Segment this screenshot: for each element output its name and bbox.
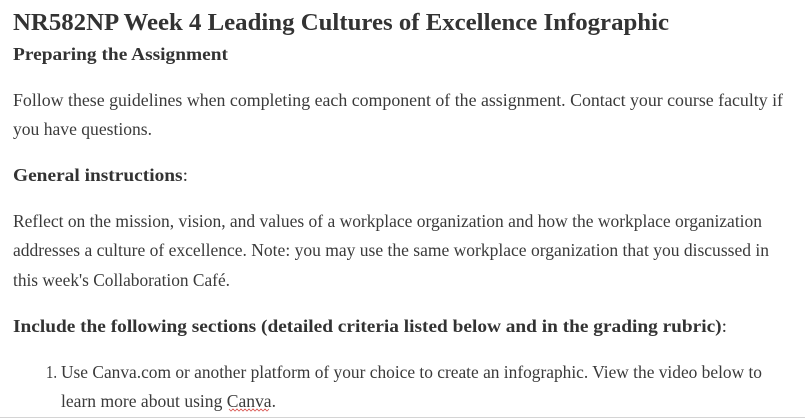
heading: general instructions: General instructions : — [13, 165, 188, 185]
title: NR582NP Week 4 Leading Cultures of Excellence Infographic — [13, 9, 669, 36]
text block: reflection instructions — [13, 211, 769, 290]
numbered list item: Use Canva.com or another platform of your choice to create an infographic. View the video below to — [61, 362, 762, 382]
heading: included sections: Include the following sections (detailed criteria listed below and in the grading rubric) : — [13, 316, 727, 336]
heading: preparing the assignment: Preparing the Assignment — [13, 44, 228, 64]
numbered list item — [46, 362, 762, 411]
numbered list item: learn more about using Canva. — [61, 391, 276, 411]
text block: reflection instructions: this week's Collaboration Café. — [13, 270, 230, 290]
text block: guidelines — [13, 90, 783, 139]
spellcheck underline — [229, 409, 269, 411]
text block: reflection instructions: addresses a culture of excellence. Note: you may use the same workplace organization that you discussed in — [13, 240, 769, 260]
bottom border — [0, 417, 805, 418]
numbered list item: 1. — [46, 362, 57, 382]
text block: guidelines: Follow these guidelines when completing each component of the assignment. Contact your course faculty if — [13, 90, 783, 110]
text block: reflection instructions: Reflect on the mission, vision, and values of a workplace organization and how the workplace organization — [13, 211, 762, 231]
text block: guidelines: you have questions. — [13, 119, 152, 139]
